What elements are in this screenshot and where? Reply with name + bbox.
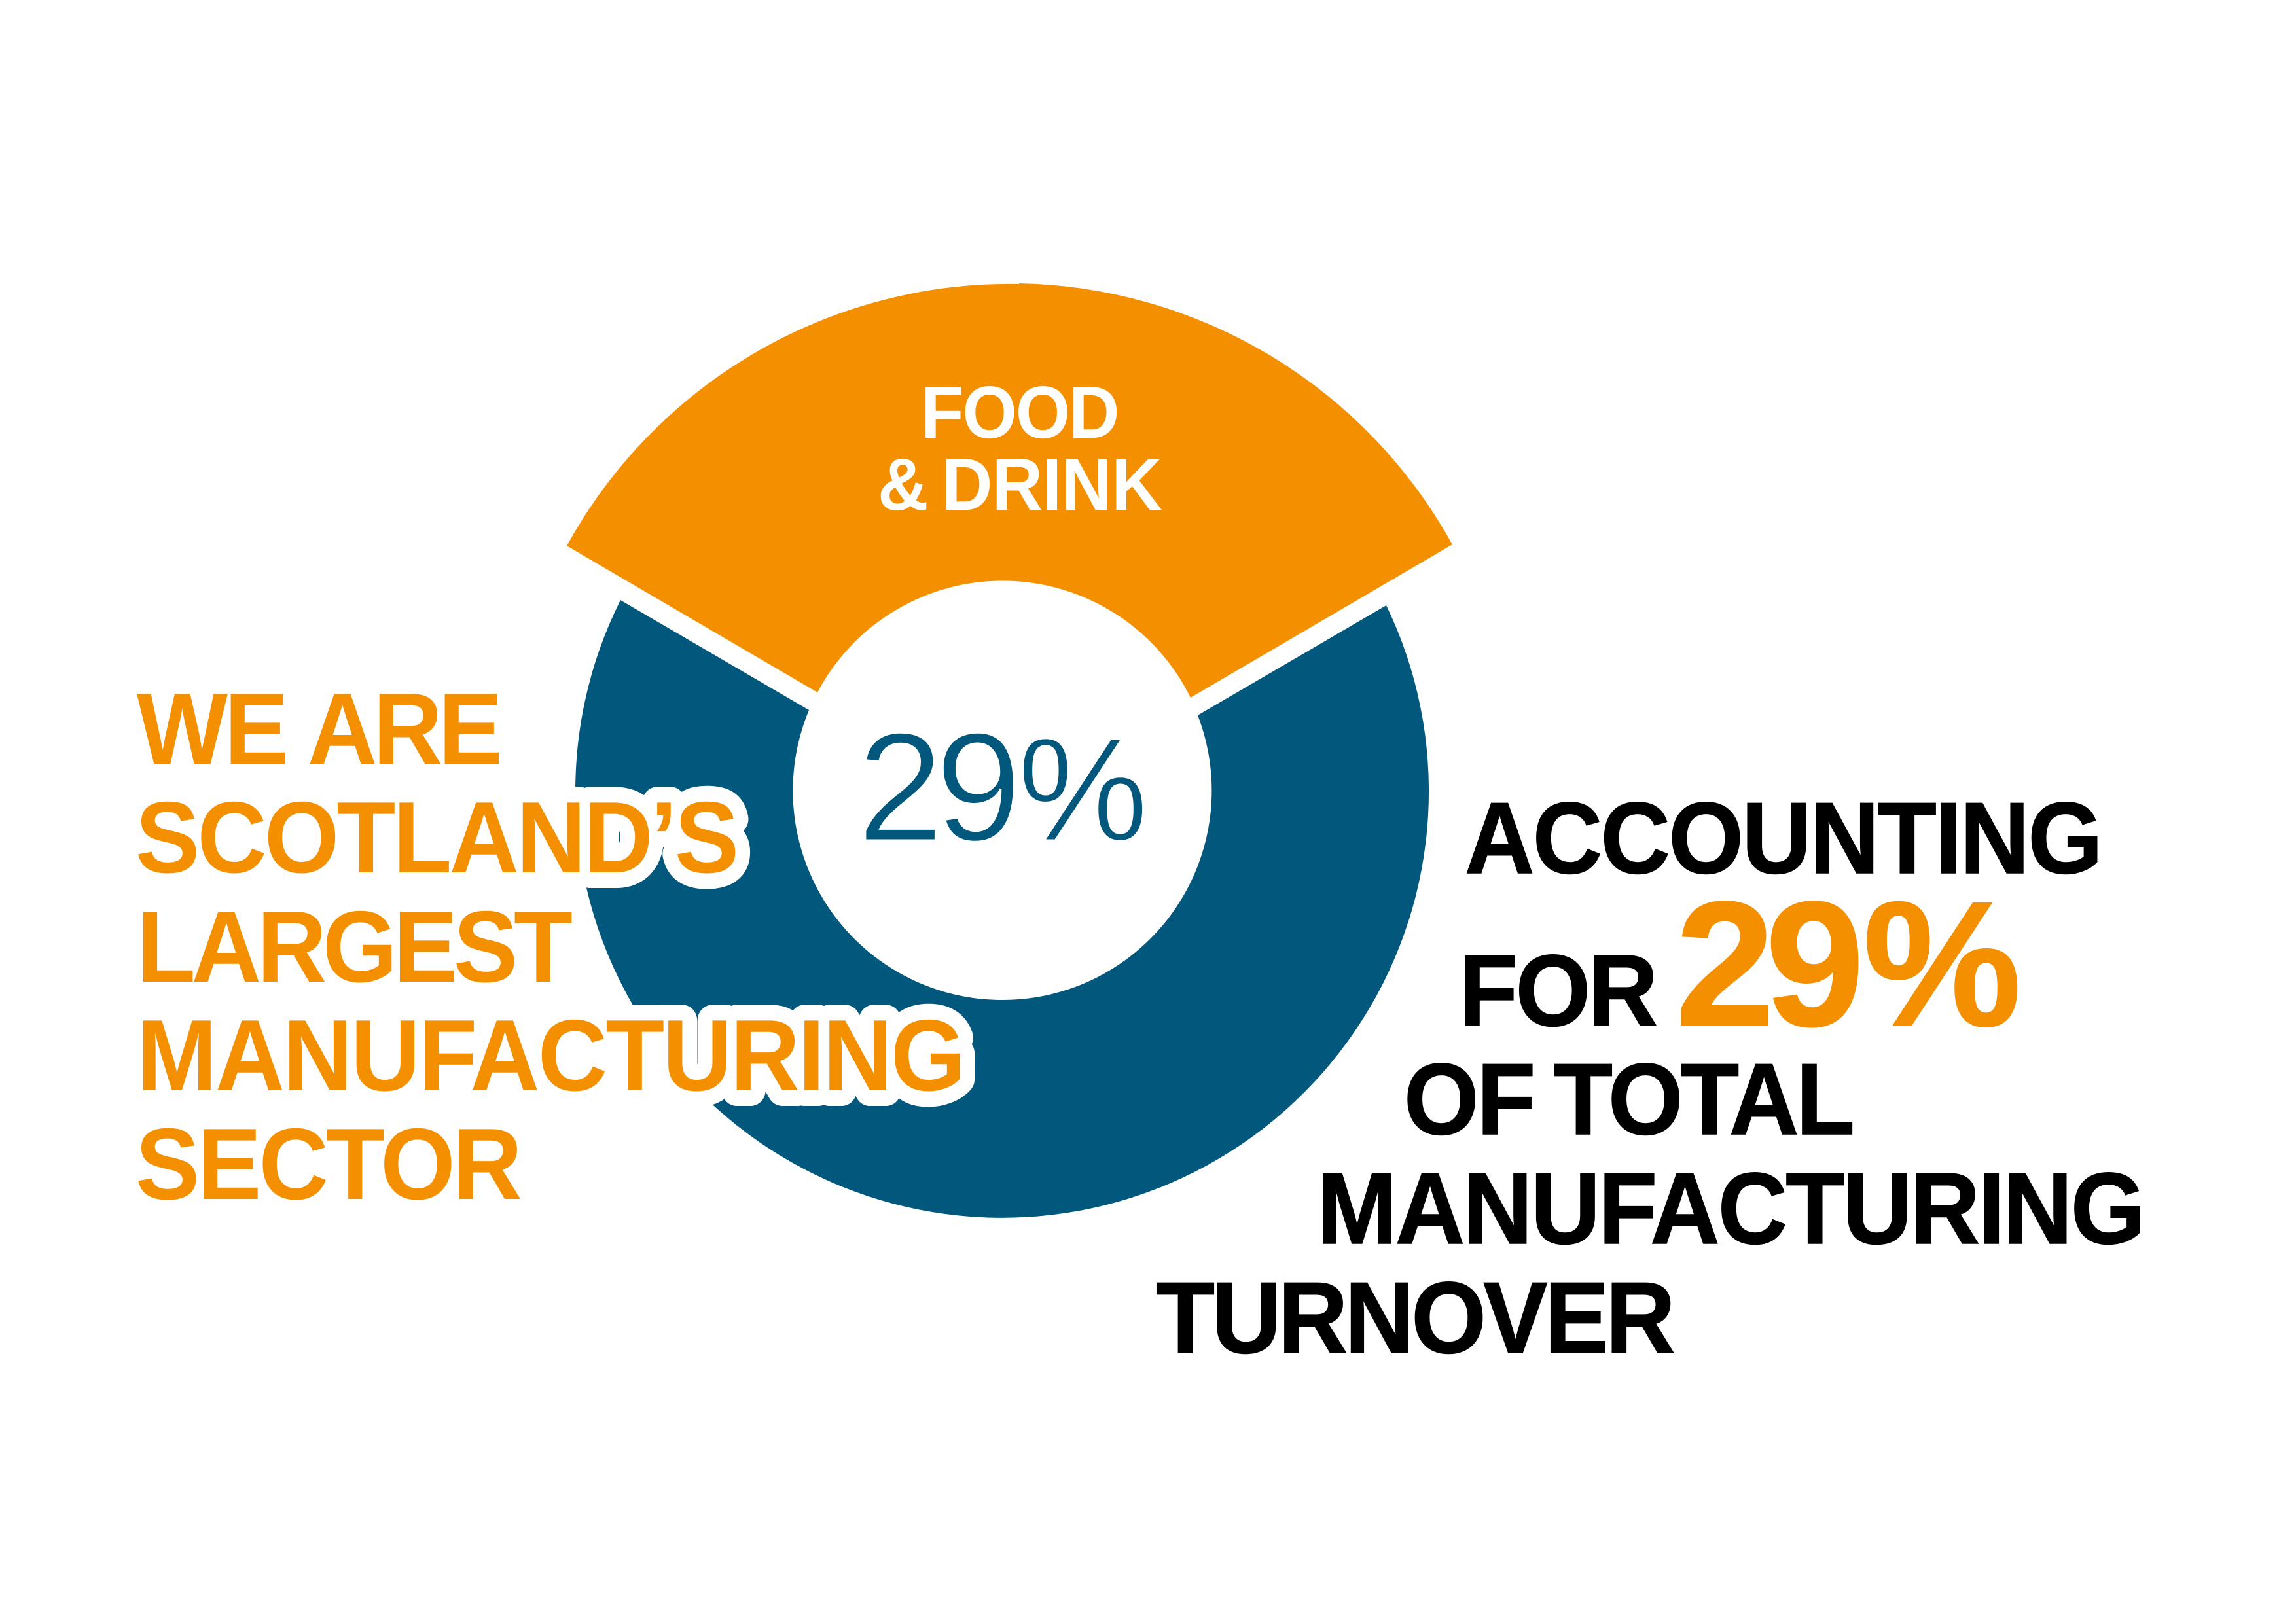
text block: accounting for 29% of total manufacturing turnover: OF: [1404, 1043, 1534, 1156]
segment label: food and drink: DRINK: [942, 443, 1162, 526]
segment label: food and drink: [878, 371, 1162, 526]
text block: largest manufacturing sector: MANUFACTURING: [137, 999, 964, 1112]
text block: largest manufacturing sector: LARGEST: [137, 890, 572, 1003]
donut chart: [567, 283, 1452, 1218]
text block: accounting for 29% of total manufacturing turnover: TURNOVER: [1156, 1261, 1674, 1374]
text block: accounting for 29% of total manufacturing turnover: FOR: [1459, 934, 1656, 1047]
text block: accounting for 29% of total manufacturing turnover: [1156, 781, 2144, 1374]
text block: largest manufacturing sector: [135, 672, 964, 1221]
text block: largest manufacturing sector: SCOTLAND’S: [135, 781, 736, 894]
centre value: 29%: 29%: [857, 701, 1149, 874]
segment label: food and drink: FOOD: [921, 371, 1118, 454]
text block: accounting for 29% of total manufacturing turnover: TOTAL: [1554, 1043, 1852, 1156]
segment label: food and drink: &: [878, 443, 929, 526]
text block: largest manufacturing sector: SECTOR: [135, 1107, 520, 1221]
segment: rest of manufacturing (71%): [575, 600, 1429, 1218]
text block: accounting for 29% of total manufacturing turnover: ACCOUNTING: [1465, 781, 2101, 895]
text block: largest manufacturing sector: WE: [137, 672, 285, 785]
segment: food and drink (29%): [567, 283, 1452, 698]
text block: largest manufacturing sector: ARE: [308, 672, 499, 785]
text block: accounting for 29% of total manufacturing turnover: MANUFACTURING: [1317, 1152, 2144, 1265]
highlighted figure: 29%: 29%: [1676, 865, 2021, 1063]
